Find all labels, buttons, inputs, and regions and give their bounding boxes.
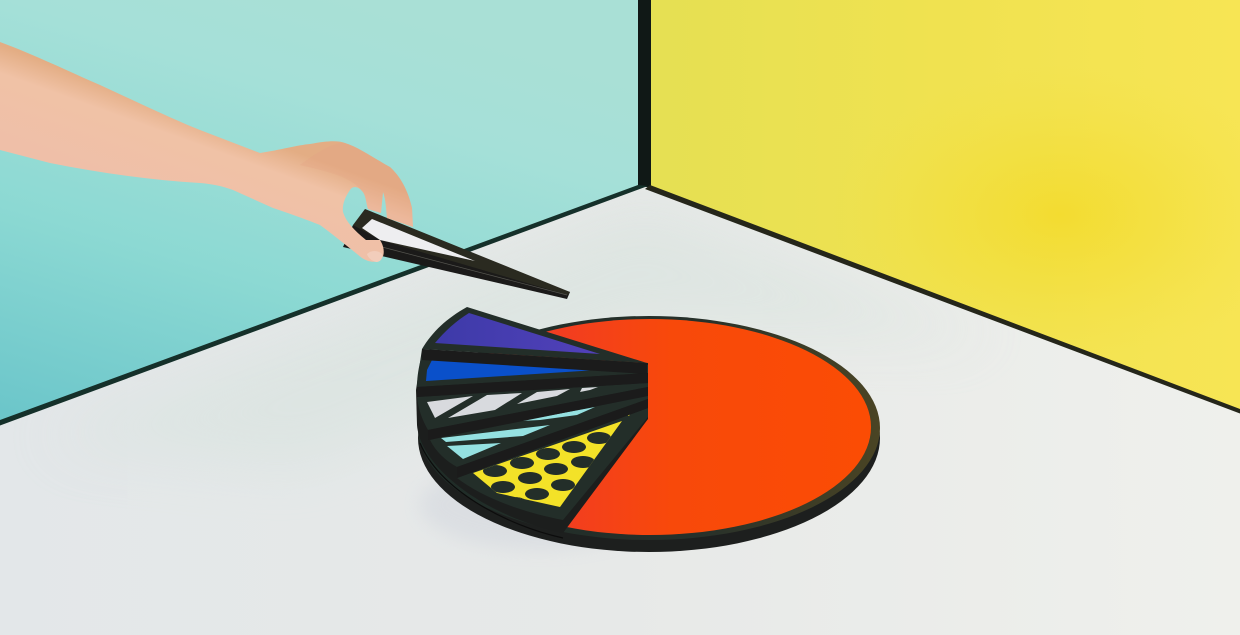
slice stack backing xyxy=(416,349,648,533)
fingernail xyxy=(367,251,382,262)
chart: pie xyxy=(416,307,880,552)
slice: cyan striped xyxy=(430,389,648,478)
black corner post xyxy=(638,0,651,187)
right skirting line xyxy=(645,185,1240,414)
left skirting line xyxy=(0,185,648,426)
pie base thickness xyxy=(418,324,880,552)
slice: white striped xyxy=(417,383,648,440)
cyan stripes xyxy=(441,407,595,459)
purple fill xyxy=(435,313,600,354)
groove between lower layers xyxy=(420,443,563,538)
slice: blue xyxy=(417,355,648,397)
white stripes xyxy=(427,387,598,418)
pie top frame xyxy=(418,316,880,540)
lifted white slice xyxy=(343,209,570,299)
slice: purple xyxy=(422,307,647,374)
hand shading xyxy=(300,143,413,227)
slice: yellow dotted xyxy=(457,408,648,520)
blue fill xyxy=(426,360,597,381)
panel: yellow wall xyxy=(645,0,1240,420)
large red slice xyxy=(429,319,871,535)
yellow fill with black dots xyxy=(473,421,622,507)
panel: white floor xyxy=(0,186,1240,635)
panel: teal wall xyxy=(0,0,645,430)
arm and hand xyxy=(0,42,413,262)
arm xyxy=(0,42,413,262)
shadow under pie xyxy=(420,460,660,550)
